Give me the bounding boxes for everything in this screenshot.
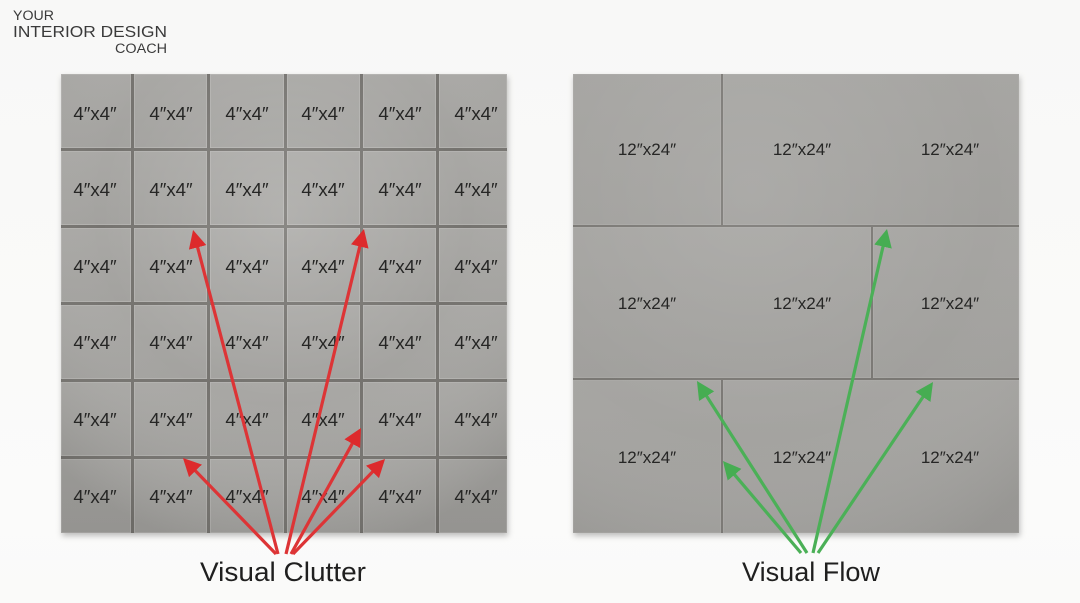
logo: Your Interior Design Coach: YOUR [13,8,54,23]
tile labels row 6: 4″x4″ [301,486,345,507]
tile labels row 3: 4″x4″ [149,256,193,277]
tile labels row 4: 4″x4″ [225,332,269,353]
tile labels: 12″x24″ [773,294,831,313]
tile labels row 4: 4″x4″ [301,332,345,353]
tile labels row 6: 4″x4″ [225,486,269,507]
arrows: red clutter arrows [193,243,375,554]
tile labels row 4 [73,332,498,353]
tile labels: 12″x24″ [773,140,831,159]
logo: Your Interior Design Coach: INTERIOR DESIGN [13,24,167,41]
tile labels [618,140,979,467]
tile labels row 1: 4″x4″ [225,103,269,124]
tile labels row 2: 4″x4″ [149,179,193,200]
tile labels row 1: 4″x4″ [301,103,345,124]
tile labels: 12″x24″ [921,140,979,159]
tile labels row 1: 4″x4″ [149,103,193,124]
tile labels row 1: 4″x4″ [378,103,422,124]
tile labels row 6: 4″x4″ [454,486,498,507]
tile labels row 2: 4″x4″ [378,179,422,200]
tile labels row 4: 4″x4″ [73,332,117,353]
arrows: green flow arrows [704,243,925,553]
tile labels row 6: 4″x4″ [378,486,422,507]
tile labels row 6: 4″x4″ [149,486,193,507]
tile labels: 12″x24″ [921,448,979,467]
tile labels row 2: 4″x4″ [73,179,117,200]
tile labels row 5: 4″x4″ [454,409,498,430]
tile labels row 2: 4″x4″ [225,179,269,200]
tile labels row 6 [73,486,498,507]
tile labels row 3: 4″x4″ [225,256,269,277]
logo: Your Interior Design Coach [13,8,167,56]
panel: 12x24 tile layout [573,74,1019,533]
tile labels row 3: 4″x4″ [378,256,422,277]
tile labels: 12″x24″ [773,448,831,467]
tile labels: 12″x24″ [618,448,676,467]
tile labels row 4: 4″x4″ [149,332,193,353]
tile labels row 6: 4″x4″ [73,486,117,507]
panel: 4x4 tile grid [61,74,507,533]
tile labels row 5 [73,409,498,430]
tile labels: 12″x24″ [618,140,676,159]
tile labels row 5: 4″x4″ [378,409,422,430]
tile labels row 1: 4″x4″ [73,103,117,124]
tile labels: 12″x24″ [921,294,979,313]
tile labels row 4: 4″x4″ [454,332,498,353]
logo: Your Interior Design Coach: COACH [115,41,167,56]
tile labels row 5: 4″x4″ [73,409,117,430]
tile labels row 3: 4″x4″ [73,256,117,277]
caption: Visual Clutter: Visual Clutter [200,557,366,587]
tile labels row 3: 4″x4″ [301,256,345,277]
tile labels row 2 [73,179,498,200]
caption: Visual Flow: Visual Flow [742,557,880,587]
tile labels row 3: 4″x4″ [454,256,498,277]
tile labels: 12″x24″ [618,294,676,313]
tile labels row 2: 4″x4″ [454,179,498,200]
tile labels row 2: 4″x4″ [301,179,345,200]
tile labels row 4: 4″x4″ [378,332,422,353]
tile labels row 3 [73,256,498,277]
tile labels row 5: 4″x4″ [149,409,193,430]
tile labels row 5: 4″x4″ [301,409,345,430]
tile labels row 1 [73,103,498,124]
tile labels row 1: 4″x4″ [454,103,498,124]
tile labels row 5: 4″x4″ [225,409,269,430]
